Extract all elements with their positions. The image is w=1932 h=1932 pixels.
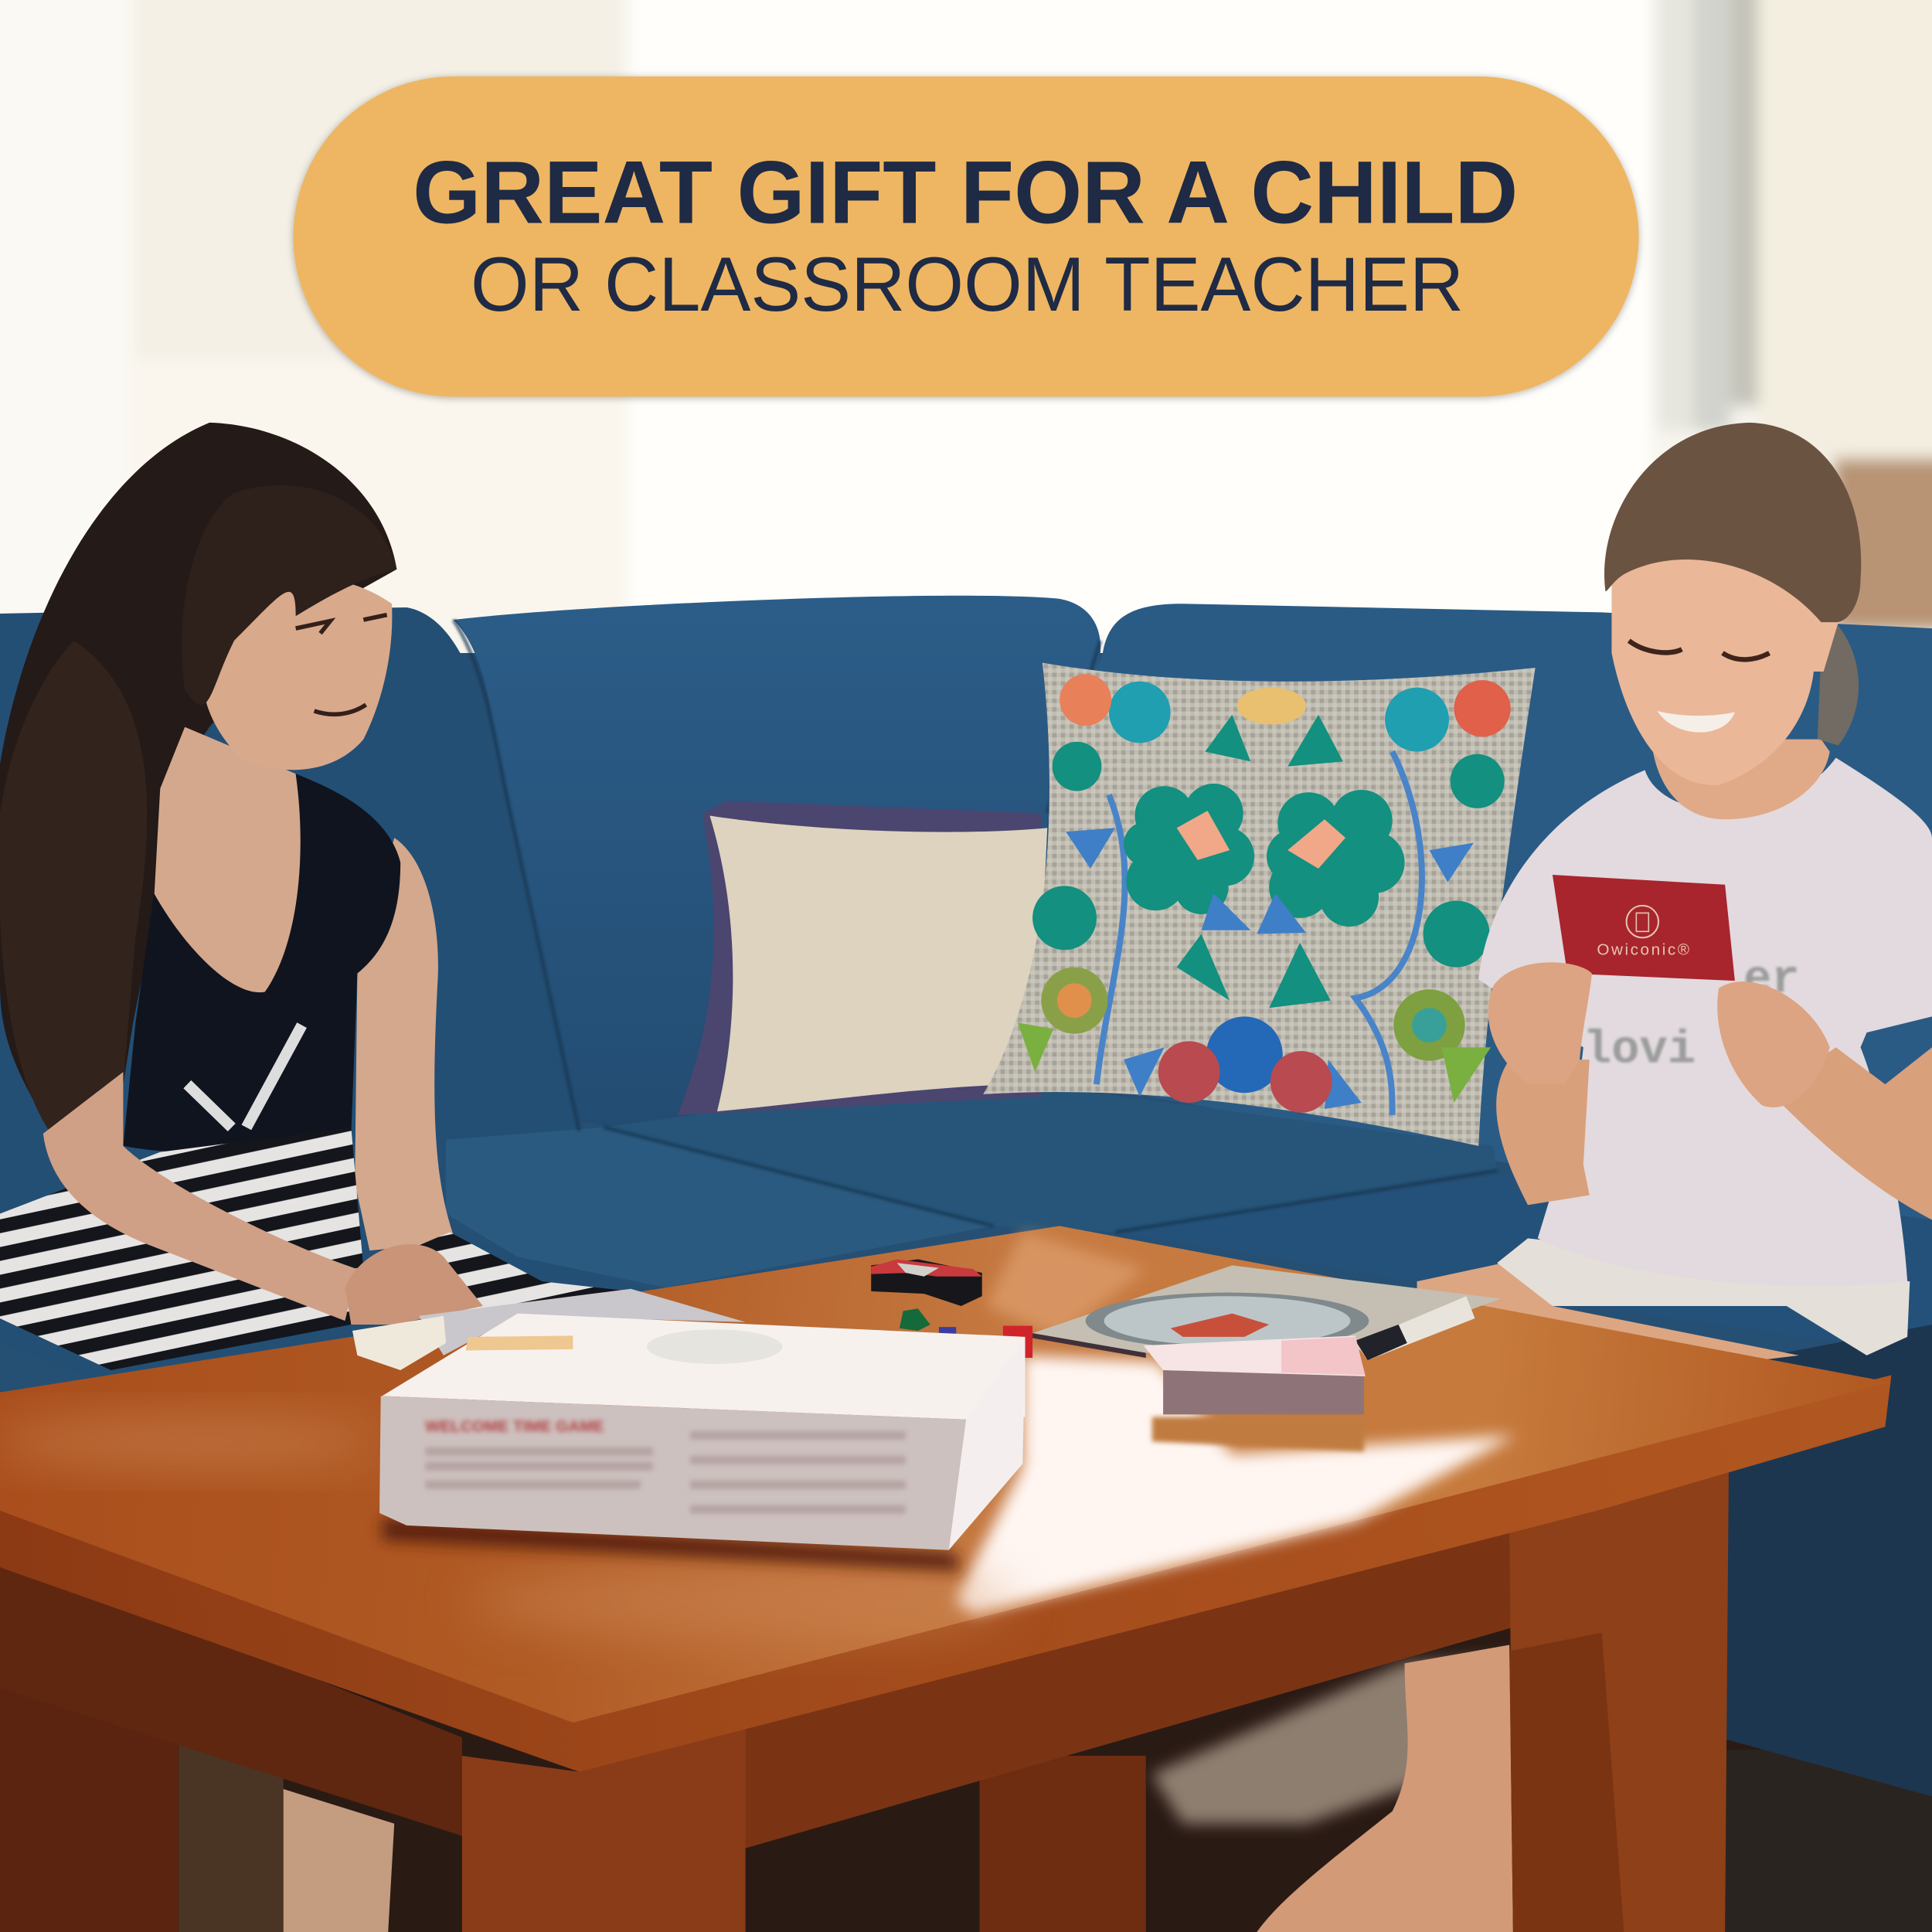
girl: left: [0, 423, 631, 1932]
pillow: floral: [983, 663, 1536, 1146]
left girl: leg: [284, 1789, 394, 1932]
red card: [1553, 875, 1735, 981]
marker pen: [1355, 1296, 1475, 1360]
eraser: [871, 1259, 982, 1306]
left girl: fringe: [182, 485, 396, 705]
headline: first line: GREAT GIFT FOR A CHILD: [413, 144, 1518, 243]
left girl: far arm: [43, 1072, 357, 1321]
game tokens: [900, 1308, 1032, 1358]
left girl: face: [202, 578, 392, 770]
card: brand name: Owiconic®: [1597, 941, 1692, 959]
sofa: base fill: [0, 653, 1932, 1405]
box: blurred back text: [425, 1418, 906, 1509]
table: glare: [955, 1355, 1515, 1614]
background: bright window and wall: [0, 0, 1932, 1207]
left girl: hair: [0, 423, 396, 1140]
table: back leg: [980, 1756, 1146, 1932]
floral: blue leaves and blooms: [1066, 682, 1474, 1109]
right girl: hands: [1488, 962, 1592, 1084]
right girl: shirt lettering: [1583, 954, 1800, 1077]
card: logo: [1627, 906, 1658, 937]
right girl: far forearm: [1496, 1060, 1590, 1205]
right girl: shirt lettering: lovi: [1583, 1024, 1696, 1077]
game booklet under hand: [352, 1289, 746, 1370]
box: top: [382, 1314, 1026, 1420]
table: apron: [579, 1466, 1602, 1849]
sofa: left back: [0, 607, 665, 1380]
sofa: right back: [1047, 604, 1932, 1232]
right girl: neck: [1651, 740, 1830, 819]
table: edge: [0, 1375, 1891, 1772]
left girl: striped skirt: [0, 1128, 631, 1370]
sofa: dark base: [1706, 1325, 1932, 1797]
right girl: shorts: [1497, 1238, 1910, 1355]
right girl: shirt lettering: er: [1743, 954, 1800, 1006]
floral: coloured blooms: [1060, 674, 1111, 726]
table: left leg: [0, 1565, 179, 1932]
right girl: white t-shirt: [1478, 758, 1932, 1286]
left girl: near arm: [355, 838, 456, 1250]
girl: right: [1257, 423, 1932, 1932]
sofa: centre seat: [604, 1087, 1497, 1232]
right girl: eyes and smile: [1629, 641, 1770, 733]
table: [0, 1226, 1891, 1932]
box: shadow: [382, 1518, 961, 1571]
sofa: centre back: [454, 596, 1100, 1128]
right girl: near arm: [1781, 1047, 1932, 1219]
card stack: [1144, 1335, 1366, 1451]
floor: [0, 1478, 1932, 1932]
left girl: hand: [345, 1244, 483, 1325]
box: side: [949, 1337, 1026, 1550]
clock dial: [1086, 1293, 1369, 1349]
table: top surface: [0, 1226, 1891, 1723]
box: blurred back text: WELCOME TIME GAME: [425, 1418, 604, 1436]
game box: [379, 1314, 1026, 1571]
left girl: hair front lock: [0, 641, 147, 1140]
sofa: [0, 596, 1932, 1797]
clock board: [1032, 1265, 1501, 1358]
floral: large teal flowers: [1032, 715, 1505, 1008]
sofa: right seat: [1115, 1168, 1932, 1355]
table: front leg: [462, 1725, 746, 1932]
floral: stems: [1097, 752, 1422, 1115]
sofa: left seat: [446, 1128, 993, 1287]
headline pill: [293, 77, 1639, 396]
sofa: seams: [454, 620, 1497, 1232]
right girl: face: [1611, 556, 1838, 785]
left girl: black dress: [123, 774, 400, 1152]
right girl: hair: [1604, 423, 1861, 622]
right girl: legs: [1417, 1263, 1799, 1380]
pillow: cream: [678, 801, 1047, 1115]
headline: second line: OR CLASSROOM TEACHER: [471, 242, 1464, 327]
table: right leg: [1509, 1472, 1729, 1932]
right girl: wisps of hair: [1818, 616, 1859, 746]
left girl: neck and chest: [145, 727, 311, 1004]
left girl: eye and smile: [296, 615, 387, 714]
box: front: [379, 1396, 966, 1550]
